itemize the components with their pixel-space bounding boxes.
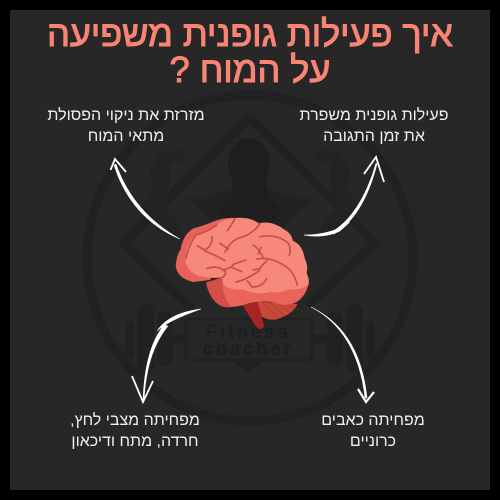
watermark: fitness coacher logo: coacher — [202, 339, 294, 360]
watermark: fitness coacher logo: Fitness — [206, 322, 290, 343]
cerebellum — [257, 301, 297, 320]
text: chronic pain — [321, 412, 425, 450]
arrow: to top left — [110, 159, 180, 239]
arrow: to bottom right — [311, 307, 374, 402]
text: chronic pain: כרוניים — [350, 432, 396, 450]
back layer — [176, 218, 240, 282]
title: על המוח ? — [170, 49, 330, 90]
main cortex — [185, 218, 309, 293]
title — [47, 13, 454, 90]
brain stem — [243, 302, 264, 329]
text: stress reduction — [70, 412, 200, 450]
lower lobe shadow — [206, 277, 308, 307]
text: stress reduction: מפחיתה מצבי לחץ, — [70, 412, 200, 429]
text: brain waste clearance: מתאי המוח — [88, 128, 164, 144]
text: brain waste clearance: מזרזת את ניקוי הפסולת — [47, 107, 205, 124]
sulci — [186, 218, 297, 287]
text: reaction time: את זמן התגובה — [323, 128, 425, 144]
icon: brain — [176, 218, 309, 329]
watermark: fitness coacher logo — [87, 95, 413, 421]
text: reaction time: פעילות גופנית משפרת — [300, 107, 448, 124]
text: reaction time — [300, 107, 448, 144]
text: brain waste clearance — [47, 107, 205, 144]
text: chronic pain: מפחיתה כאבים — [321, 412, 425, 429]
text: stress reduction: חרדה, מתח ודיכאון — [71, 432, 199, 450]
title: איך פעילות גופנית משפיעה — [47, 13, 453, 54]
arrow: to top right — [304, 157, 384, 236]
arrow: to bottom left — [132, 309, 201, 402]
